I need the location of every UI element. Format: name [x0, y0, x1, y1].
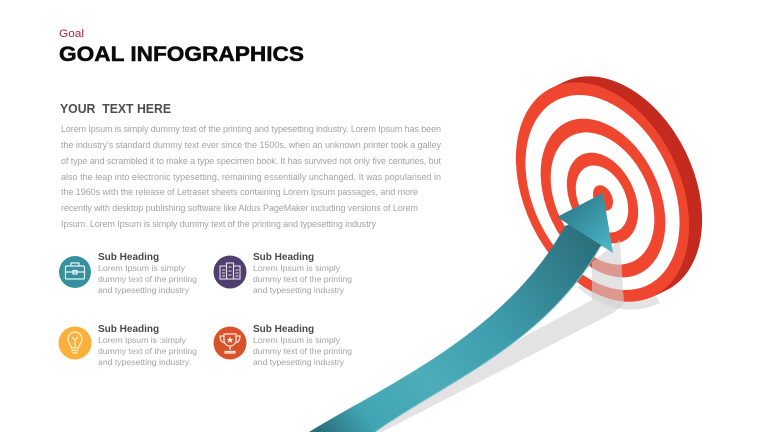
sub item: trophy: dummy text of the printing — [253, 346, 352, 356]
section heading: YOUR TEXT HERE — [60, 102, 171, 116]
sub item: briefcase: dummy text of the printing — [98, 274, 197, 284]
sub item: light bulb: Sub Heading — [98, 324, 159, 335]
sub item: trophy: Lorem Ipsum is simply — [253, 335, 341, 345]
heading label: Goal: Goal — [59, 28, 84, 40]
icon: briefcase — [59, 256, 91, 288]
sub item: briefcase: Lorem Ipsum is simply — [98, 263, 186, 273]
sub item: buildings — [214, 252, 352, 295]
target rings — [482, 54, 723, 330]
sub item: briefcase: Sub Heading — [98, 252, 159, 263]
icon: light bulb — [58, 326, 92, 360]
body paragraph: Lorem Ipsum is simply dummy text of the printing and typesetting industry. Lorem Ipsum has been — [61, 124, 441, 134]
body paragraph: the industry's standard dummy text ever since the 1500s, when an unknown printer took a galley — [61, 140, 442, 150]
body paragraph: also the leap into electronic typesetting, remaining essentially unchanged. It was popularised in — [61, 172, 441, 182]
target — [482, 48, 736, 330]
sub item: light bulb: dummy text of the printing — [98, 346, 197, 356]
sub item: trophy — [214, 324, 352, 367]
sub item: light bulb — [58, 324, 197, 367]
body paragraph: the 1960s with the release of Letraset sheets containing Lorem Ipsum passages, and more — [61, 187, 418, 197]
sub item: briefcase: and typesetting industry — [98, 285, 190, 295]
sub item: buildings: Lorem Ipsum is simply — [253, 263, 341, 273]
sub item: buildings: Sub Heading — [253, 252, 314, 263]
target base shadow — [577, 270, 660, 310]
sub item: trophy: and typesetting industry — [253, 357, 345, 367]
arrow shaft — [309, 222, 605, 432]
title: GOAL INFOGRAPHICS — [59, 43, 304, 66]
body paragraph — [61, 124, 442, 229]
sub item: light bulb: Lorem Ipsum is :simply — [98, 335, 187, 345]
target thickness — [484, 48, 736, 329]
sub item: trophy: Sub Heading — [253, 324, 314, 335]
body paragraph: Ipsum. Lorem Ipsum is simply dummy text of the printing and typesetting industry — [61, 219, 376, 229]
sub item: briefcase — [59, 252, 197, 295]
sub item: buildings: dummy text of the printing — [253, 274, 352, 284]
arrow shadow — [372, 240, 624, 432]
icon: buildings — [214, 256, 246, 288]
arrow head — [557, 193, 613, 253]
sub item: light bulb: and typesetting industry. — [98, 357, 191, 367]
body paragraph: recently with desktop publishing software like Aldus PageMaker including versions of Lorem — [61, 203, 418, 213]
icon: trophy — [214, 326, 246, 360]
arrow — [309, 193, 613, 432]
body paragraph: of type and scrambled it to make a type specimen book. It has survived not only five centuries, but — [61, 156, 441, 166]
sub item: buildings: and typesetting industry — [253, 285, 345, 295]
